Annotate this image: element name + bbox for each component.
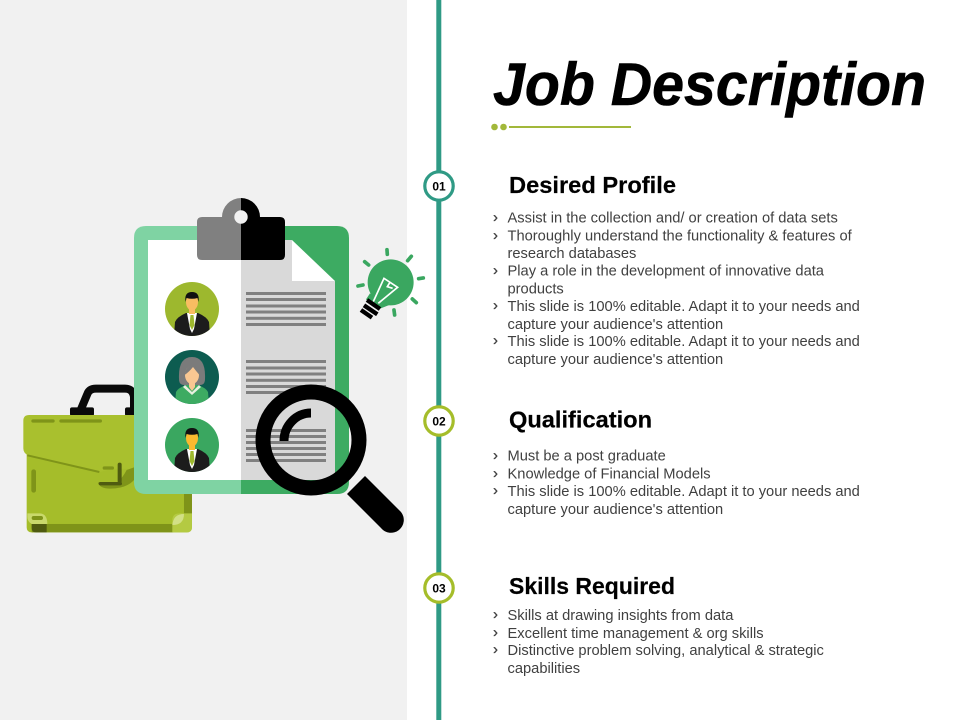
heading: Qualification: Qualification xyxy=(509,406,652,432)
list: qualification: › xyxy=(493,465,498,482)
node 01 xyxy=(425,172,453,200)
list: skills required: Excellent time management & org skills xyxy=(508,626,764,642)
avatar: woman on dark teal xyxy=(165,350,219,404)
list: desired profile: Assist in the collection and/ or creation of data sets xyxy=(508,210,838,226)
list: desired profile xyxy=(493,209,860,368)
node 03 xyxy=(425,574,453,602)
clipboard board left half xyxy=(134,226,241,494)
node 02: 02 xyxy=(432,414,446,428)
clipboard clip xyxy=(197,198,285,260)
list: desired profile: products xyxy=(508,282,564,298)
list: desired profile: › xyxy=(493,332,498,349)
document text lines, group one xyxy=(246,292,326,326)
list: desired profile: › xyxy=(493,209,498,226)
timeline vertical line xyxy=(436,0,441,720)
list: qualification xyxy=(493,447,860,518)
list: desired profile: capture your audience's attention xyxy=(508,317,723,333)
list: skills required: Skills at drawing insights from data xyxy=(508,608,734,624)
list: desired profile: capture your audience's attention xyxy=(508,352,723,368)
list: qualification: Knowledge of Financial Models xyxy=(508,466,711,482)
list: desired profile: › xyxy=(493,262,498,279)
white sheet xyxy=(148,240,241,480)
list: qualification: capture your audience's attention xyxy=(508,502,723,518)
node 01: 01 xyxy=(432,179,446,193)
node 03: 03 xyxy=(432,581,446,595)
list: desired profile: › xyxy=(493,227,498,244)
avatar: man on olive xyxy=(165,282,219,336)
icon: briefcase xyxy=(23,389,192,532)
title underline with dots xyxy=(491,124,631,130)
icon: magnifying glass xyxy=(263,392,404,533)
icon: light bulb xyxy=(358,250,423,318)
page fold corner xyxy=(292,240,335,281)
avatar: man on green xyxy=(165,418,219,472)
clipboard xyxy=(134,198,349,494)
list: desired profile: research databases xyxy=(508,246,636,262)
node 02 xyxy=(425,407,453,435)
grey sheet with fold xyxy=(241,240,335,480)
list: qualification: › xyxy=(493,482,498,499)
list: desired profile: Thoroughly understand the functionality & features of xyxy=(508,228,853,244)
list: desired profile: Play a role in the development of innovative data xyxy=(508,264,825,280)
list: skills required: › xyxy=(493,641,498,658)
list: skills required: capabilities xyxy=(508,661,580,677)
clipboard board right half xyxy=(241,226,349,494)
list: skills required: Distinctive problem solving, analytical & strategic xyxy=(508,643,824,659)
list: skills required: › xyxy=(493,606,498,623)
document text lines, group two xyxy=(246,360,326,394)
list: skills required: › xyxy=(493,624,498,641)
list: qualification: › xyxy=(493,447,498,464)
heading: Skills Required: Skills Required xyxy=(509,573,675,599)
title: Job Description xyxy=(493,51,926,118)
list: qualification: This slide is 100% editable. Adapt it to your needs and xyxy=(508,484,860,500)
list: qualification: Must be a post graduate xyxy=(508,448,666,464)
document text lines, group three xyxy=(246,429,326,462)
left grey panel xyxy=(0,0,407,720)
list: desired profile: This slide is 100% editable. Adapt it to your needs and xyxy=(508,334,860,350)
list: desired profile: This slide is 100% editable. Adapt it to your needs and xyxy=(508,299,860,315)
list: skills required xyxy=(493,606,824,677)
heading: Desired Profile: Desired Profile xyxy=(509,172,676,198)
list: desired profile: › xyxy=(493,297,498,314)
